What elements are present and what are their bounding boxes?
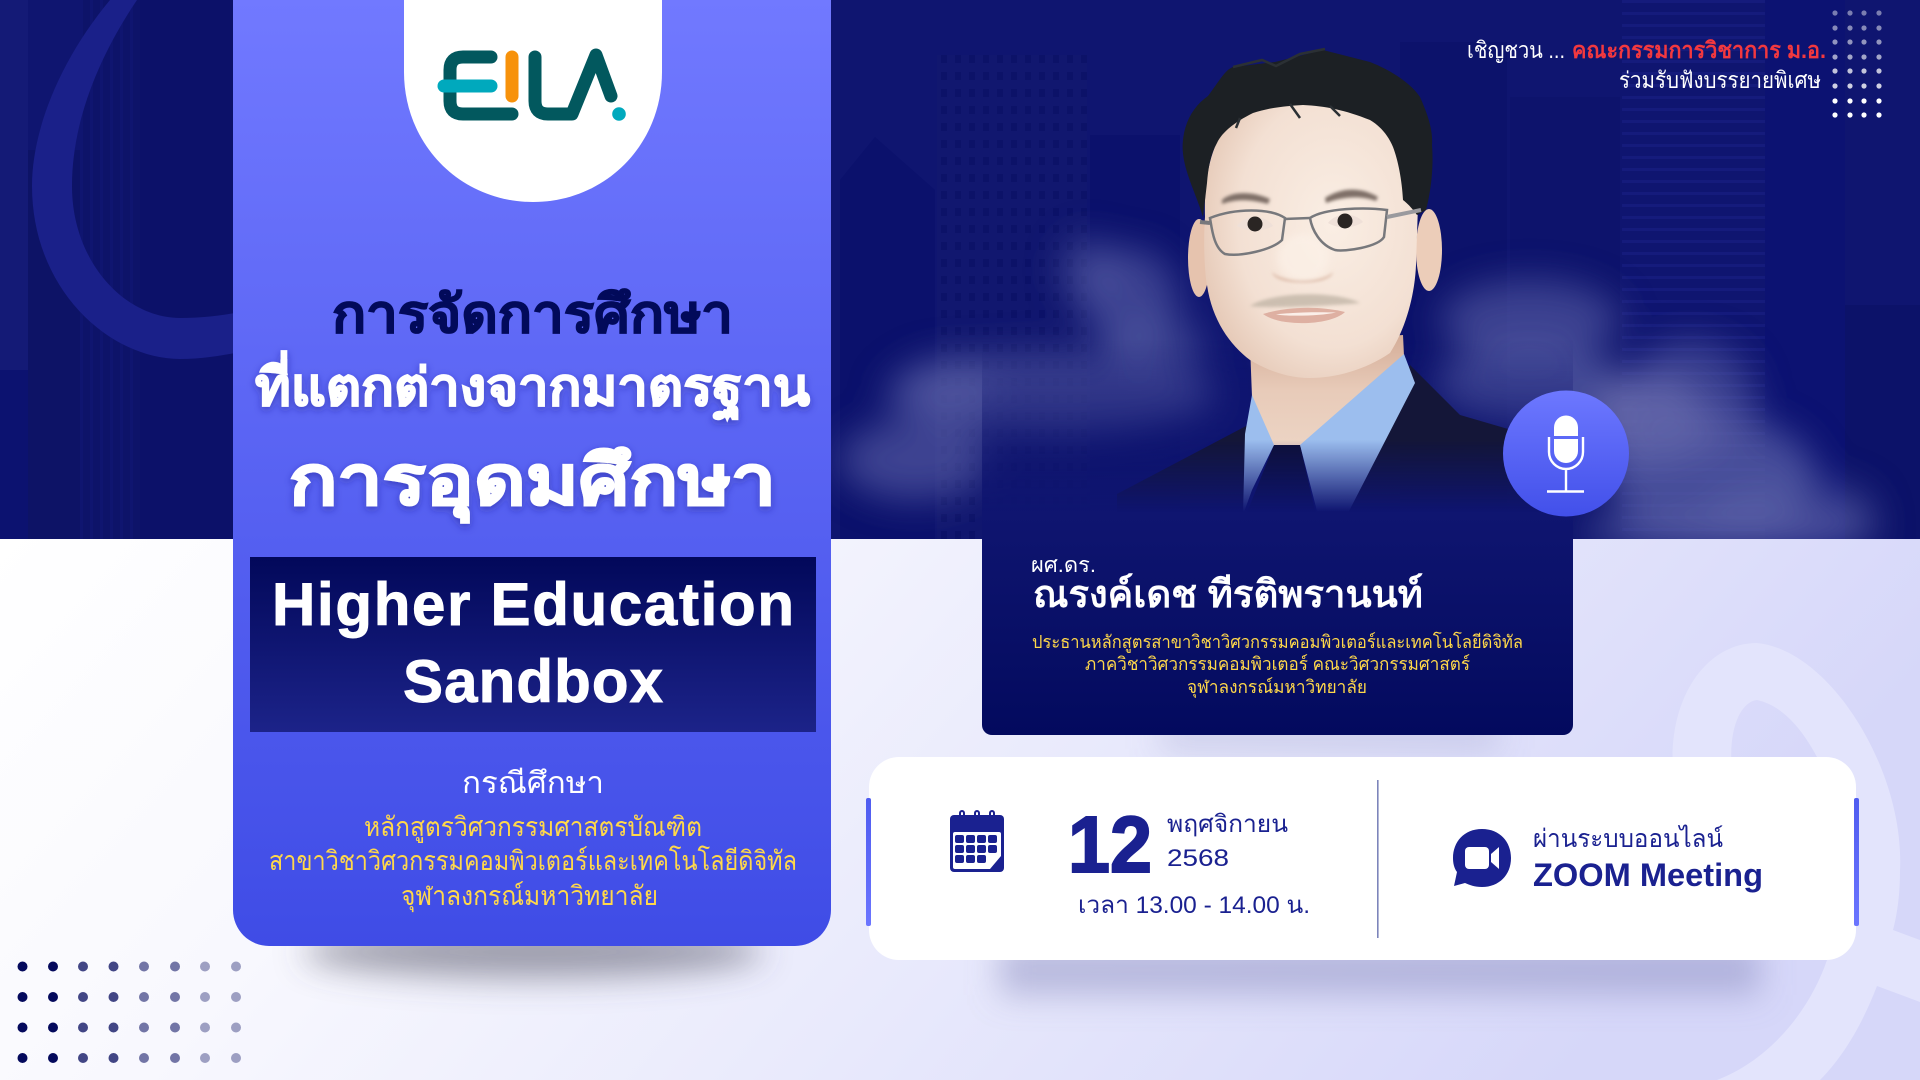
event info card [866,757,1859,960]
speaker role: ประธานหลักสูตรสาขาวิชาวิศวกรรมคอมพิวเตอร์และเทคโนโลยีดิจิทัล [1032,631,1523,653]
icon: microphone [1503,390,1629,516]
title line 3: การอุดมศึกษา [289,443,776,523]
speaker role [1032,631,1523,698]
speaker role: ภาควิชาวิศวกรรมคอมพิวเตอร์ คณะวิศวกรรมศาสตร์ [1085,654,1470,674]
ears [1188,219,1210,297]
invitation text [1467,37,1826,93]
logo panel [404,0,662,202]
platform text: ผ่านระบบออนไลน์ [1533,824,1723,853]
speaker details [1031,554,1523,698]
month and year: พฤศจิกายน [1167,811,1288,838]
logo: EILA [444,55,626,121]
invitation text: เชิญชวน ... [1467,37,1565,63]
case study description: หลักสูตรวิศวกรรมศาสตรบัณฑิต [364,812,702,843]
dot grid: top right [1832,10,1882,118]
city buildings [0,0,1920,540]
hair [1183,50,1433,217]
title line 2: ที่แตกต่างจากมาตรฐาน [255,351,810,421]
speaker portrait [1117,48,1524,508]
face [1204,95,1418,378]
soft shadows [303,722,1760,995]
invitation text: ร่วมรับฟังบรรยายพิเศษ [1619,67,1821,93]
eyebrows [1222,190,1378,204]
month and year [1167,811,1288,872]
hair strands [1233,49,1340,128]
zoom meeting label: ZOOM Meeting [1533,857,1763,893]
main title card [233,0,831,946]
lower page background [0,539,1920,1080]
speaker title: ผศ.ดร. [1031,554,1096,577]
glasses [1200,209,1421,255]
title line 1: การจัดการศึกษา [332,286,733,344]
decorative swirl: upper left [32,0,240,359]
top band with city background [0,0,1920,550]
sandbox heading box: Sandbox [403,648,663,715]
month and year: 2568 [1167,845,1229,872]
case study description: จุฬาลงกรณ์มหาวิทยาลัย [401,880,658,913]
icon: zoom [1453,829,1511,887]
case study label: กรณีศึกษา [462,767,604,800]
dot grid: bottom left [18,962,241,1063]
speaker role: จุฬาลงกรณ์มหาวิทยาลัย [1187,677,1367,698]
speaker name: ณรงค์เดช ทีรติพรานนท์ [1033,573,1423,616]
clouds [840,238,1880,550]
date number: 12 [1068,800,1152,889]
eyes [1237,214,1363,232]
sandbox heading box [250,557,816,732]
tie [1246,445,1316,515]
shirt collar [1243,354,1415,515]
decorative swirl: lower right [1673,643,1920,1080]
icon: calendar [950,811,1004,872]
case study description [269,812,797,913]
sandbox heading box: Higher Education [272,571,794,638]
case study description: สาขาวิชาวิศวกรรมคอมพิวเตอร์และเทคโนโลยีดิจิทัล [269,845,797,876]
time: เวลา 13.00 - 14.00 น. [1078,892,1310,919]
suit [1117,365,1524,502]
invitation text: คณะกรรมการวิชาการ ม.อ. [1572,37,1826,63]
speaker panel background [982,340,1573,735]
nose and mouth shading [1251,243,1358,324]
neck [1250,335,1404,447]
